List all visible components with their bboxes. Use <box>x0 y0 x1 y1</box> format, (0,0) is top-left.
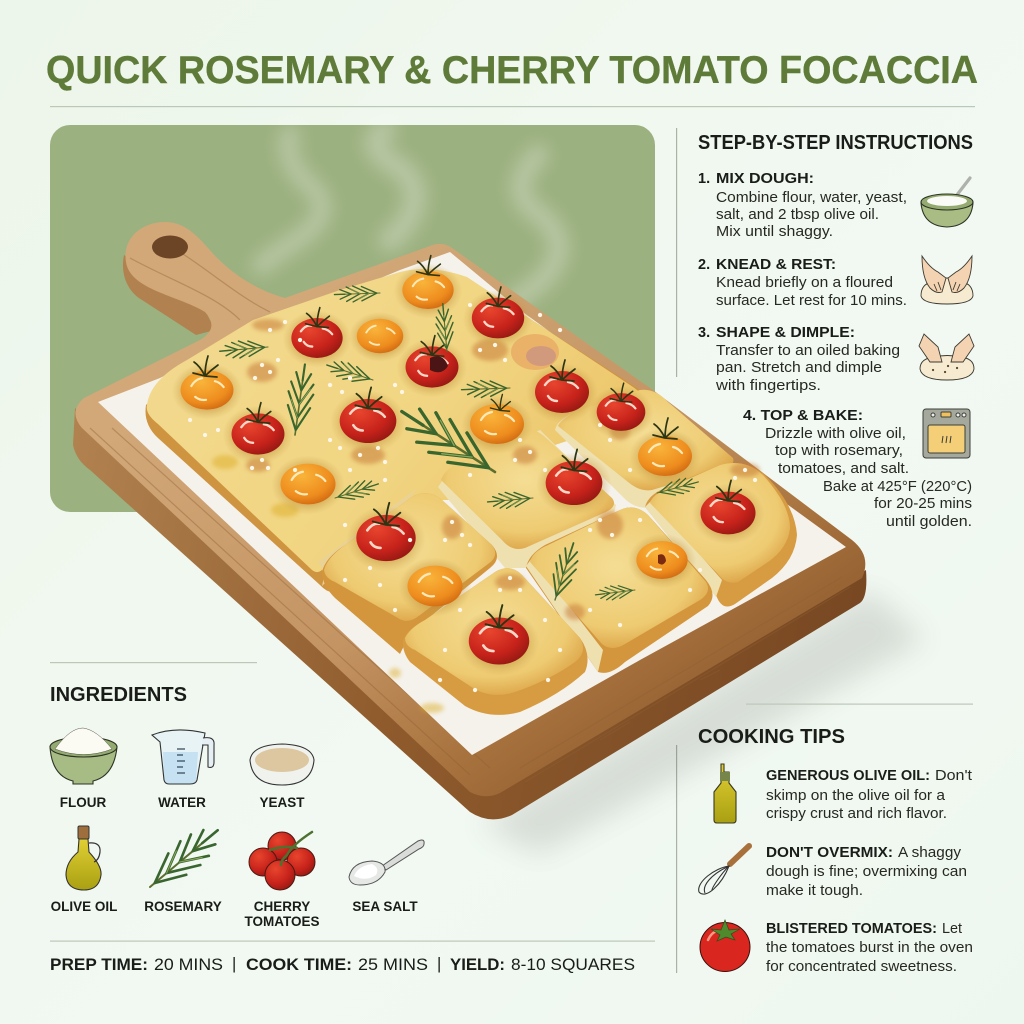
tip: olive oil: GENEROUS OLIVE OIL: <box>766 768 930 784</box>
tip: olive oil: skimp on the olive oil for a <box>766 788 946 804</box>
tip: whisk: make it tough. <box>766 883 863 899</box>
icon: oven <box>923 409 970 458</box>
step 3 text: with fingertips. <box>715 378 821 394</box>
tip: whisk: A shaggy <box>898 845 962 861</box>
heading: ingredients: INGREDIENTS <box>50 684 187 706</box>
step 1 text: Mix until shaggy. <box>716 224 833 240</box>
step 3 text <box>698 325 900 394</box>
slab cut face <box>318 488 417 586</box>
stats bar: | <box>437 955 441 973</box>
ingredient: sea salt: SEA SALT <box>352 899 418 914</box>
step 2 text <box>698 257 907 309</box>
tip: olive oil <box>714 764 972 823</box>
slice: left middle <box>322 493 497 654</box>
panel: ingredients <box>50 662 424 929</box>
step 4 text: 4. TOP & BAKE: <box>743 408 863 424</box>
ingredient: water <box>152 730 214 810</box>
board top <box>75 222 865 796</box>
stats bar <box>50 940 655 974</box>
step 1 text <box>698 171 907 240</box>
step 2 text: Knead briefly on a floured <box>716 275 893 291</box>
tip: tomato: Let <box>942 921 962 937</box>
tip: whisk: dough is fine; overmixing can <box>766 864 967 880</box>
tip: whisk <box>699 845 967 899</box>
ingredient: olive oil: OLIVE OIL <box>51 899 117 914</box>
rosemary sprigs <box>219 285 700 603</box>
tip: tomato: BLISTERED TOMATOES: <box>766 921 937 937</box>
icon: dimpling hands <box>919 334 974 380</box>
tip: tomato: for concentrated sweetness. <box>766 959 957 975</box>
step 4 text: Drizzle with olive oil, <box>765 426 906 442</box>
step 4 text: for 20-25 mins <box>874 496 972 512</box>
olive oil sheen <box>212 455 444 713</box>
cutting board with focaccia <box>73 222 925 855</box>
stats bar: PREP TIME: <box>50 956 148 974</box>
panel: step-by-step instructions <box>698 132 974 530</box>
step 4 text: Bake at 425°F (220°C) <box>823 479 972 495</box>
step 2 text: surface. Let rest for 10 mins. <box>716 293 907 309</box>
browned patches <box>246 319 760 620</box>
ingredient: rosemary <box>140 818 228 914</box>
ingredient: cherry tomatoes <box>244 832 320 929</box>
ingredient: yeast <box>250 744 314 810</box>
ingredient: rosemary: ROSEMARY <box>144 899 222 914</box>
handle side <box>123 255 215 335</box>
step 3 text: pan. Stretch and dimple <box>716 360 882 376</box>
step 2 text: 2. <box>698 257 710 273</box>
icon: mixing bowl <box>921 178 973 227</box>
tip: olive oil: crispy crust and rich flavor. <box>766 806 947 822</box>
stats bar: 8-10 SQUARES <box>511 956 635 974</box>
ingredient: yeast: YEAST <box>259 795 305 810</box>
tip: tomato: the tomatoes burst in the oven <box>766 940 973 956</box>
ingredient: water: WATER <box>158 795 206 810</box>
steam <box>262 130 559 300</box>
heading: instructions: STEP-BY-STEP INSTRUCTIONS <box>698 132 973 154</box>
step 1 text: salt, and 2 tbsp olive oil. <box>716 207 879 223</box>
stats bar: | <box>232 955 236 973</box>
title: QUICK ROSEMARY & CHERRY TOMATO FOCACCIA <box>46 49 978 92</box>
ingredient: sea salt <box>349 840 424 914</box>
step 4 text: tomatoes, and salt. <box>778 461 909 477</box>
step 4 text: until golden. <box>886 514 972 530</box>
panel: cooking tips <box>698 704 973 975</box>
focaccia main slab <box>147 269 650 572</box>
step 3 text: Transfer to an oiled baking <box>716 343 900 359</box>
stats bar: YIELD: <box>450 956 505 974</box>
step 1 text: 1. <box>698 171 710 187</box>
ingredient: cherry tomatoes: TOMATOES <box>244 914 320 929</box>
step 3 text: SHAPE & DIMPLE: <box>716 325 855 341</box>
step 2 text: KNEAD & REST: <box>716 257 836 273</box>
focaccia crust base <box>146 275 640 592</box>
board shadow <box>480 590 925 855</box>
ingredient: cherry tomatoes: CHERRY <box>254 899 310 914</box>
step 4 text <box>743 408 972 530</box>
step 3 text: 3. <box>698 325 710 341</box>
slice: centre <box>438 430 616 568</box>
icon: kneading hands <box>921 256 973 304</box>
tip: tomato <box>700 920 973 975</box>
board side <box>73 408 866 819</box>
step 4 text: top with rosemary, <box>775 443 903 459</box>
heading: cooking tips: COOKING TIPS <box>698 726 845 748</box>
sea salt flakes <box>190 305 755 690</box>
step 1 text: MIX DOUGH: <box>716 171 814 187</box>
slice: lower right <box>526 507 713 673</box>
ingredient: flour <box>50 728 117 810</box>
stats bar: COOK TIME: <box>246 956 352 974</box>
slice: bottom <box>403 568 588 715</box>
board handle hole <box>152 236 188 258</box>
tip: olive oil: Don't <box>935 768 972 784</box>
stats bar: 25 MINS <box>358 956 428 974</box>
slice: upper right <box>555 390 733 508</box>
cherry tomatoes <box>172 256 765 676</box>
tip: whisk: DON'T OVERMIX: <box>766 845 893 861</box>
parchment paper <box>98 252 846 755</box>
ingredient: flour: FLOUR <box>60 795 106 810</box>
stats bar: 20 MINS <box>154 956 223 974</box>
ingredient: olive oil <box>51 826 117 914</box>
slice: right corner <box>645 463 797 607</box>
panel: green backdrop <box>50 125 655 512</box>
step 1 text: Combine flour, water, yeast, <box>716 190 907 206</box>
